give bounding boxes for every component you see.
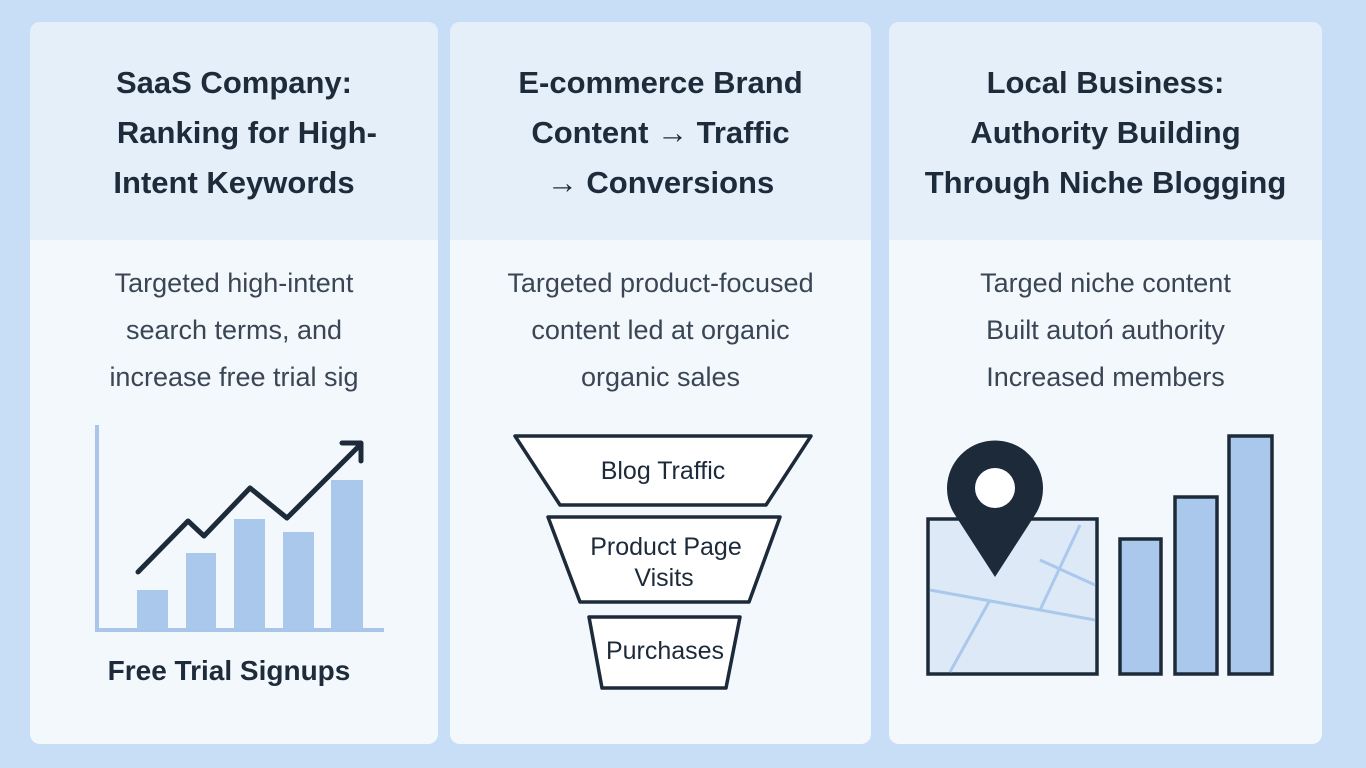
text: SaaS body: Targeted high-intent — [115, 268, 353, 298]
panel: E-commerce — [450, 22, 871, 744]
icon: map with pin and bars — [928, 436, 1272, 674]
panel: Local Business — [889, 22, 1322, 744]
heading: SaaS — [113, 65, 377, 200]
text: E-commerce body — [507, 268, 814, 392]
text: SaaS body: search terms, and — [126, 315, 342, 345]
text: SaaS body — [109, 268, 359, 392]
heading: Local Business: Authority Building — [970, 115, 1241, 150]
text: E-commerce body: organic sales — [581, 362, 740, 392]
heading: E-commerce: E-commerce Brand — [518, 65, 803, 100]
chart: funnel: Product Page — [590, 533, 742, 561]
heading: Local Business: Local Business: — [987, 65, 1224, 100]
text: Local body — [980, 268, 1231, 392]
heading: SaaS: Ranking for High- — [117, 115, 377, 150]
text: Local body: Increased members — [986, 362, 1225, 392]
heading: SaaS: Intent Keywords — [113, 165, 355, 200]
panel: SaaS — [30, 22, 438, 744]
text: SaaS body: increase free trial sig — [109, 362, 359, 392]
label: Free Trial Signups: Free Trial Signups — [108, 655, 350, 686]
heading: E-commerce — [518, 65, 803, 200]
chart: funnel: Purchases — [606, 637, 724, 665]
text: E-commerce body: content led at organic — [531, 315, 790, 345]
heading: E-commerce: Content → Traffic — [531, 115, 790, 150]
text: E-commerce body: Targeted product-focused — [507, 268, 814, 298]
chart: funnel: Visits — [634, 564, 694, 592]
text: Local body: Targed niche content — [980, 268, 1231, 298]
text: Local body: Built autoń authority — [986, 315, 1225, 345]
heading: Local Business: Through Niche Blogging — [925, 165, 1286, 200]
chart: funnel: Blog Traffic — [601, 457, 725, 485]
chart: funnel — [515, 436, 811, 688]
heading: SaaS: SaaS Company: — [116, 65, 352, 100]
heading: E-commerce: → Conversions — [547, 165, 774, 200]
chart: bar chart with trend arrow — [97, 425, 384, 630]
heading: Local Business — [925, 65, 1286, 200]
